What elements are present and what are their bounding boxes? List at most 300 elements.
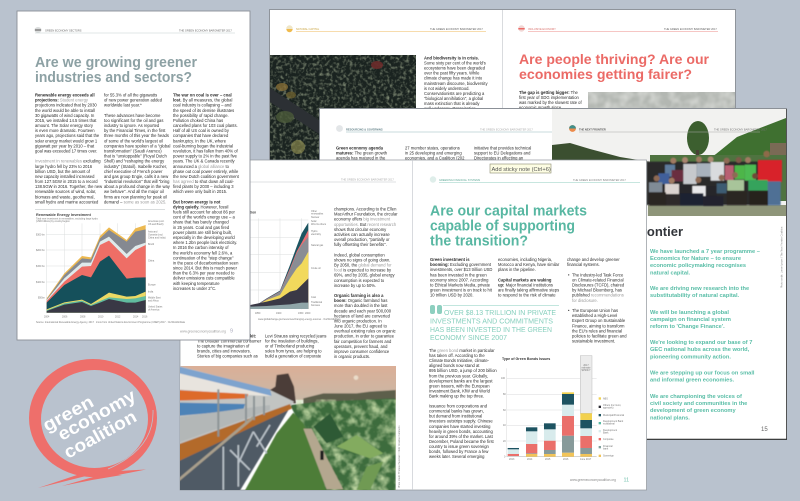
text: financial systems bullets: • xyxy=(568,308,570,313)
text: levi strauss: build a generation of corporate xyxy=(265,354,322,358)
chart y-axis labels: 0 xyxy=(504,456,506,458)
chart y-axis labels: 40 xyxy=(503,424,506,427)
text: war on coal and brown energy: power supply to 2% in the past five xyxy=(173,154,238,159)
text: war on coal and brown energy: The war on coal is over – coal xyxy=(173,92,232,98)
text: gigawatts and oil industry: of some of the world's largest oil xyxy=(104,138,163,143)
text: renewable energy exceeds projections: 138.5GW in 2016. Together, the new xyxy=(35,184,102,189)
text: gigawatts and oil industry: by the Financial Times, in the first xyxy=(104,128,166,133)
chart labels: Other xyxy=(311,210,317,213)
logo ring xyxy=(29,359,157,488)
chart labels: Solar xyxy=(311,220,317,223)
text: green bond market: weeks later. Several emerging xyxy=(429,454,485,459)
text: the gap is getting bigger: economic growth since xyxy=(519,105,562,110)
text: green bond market: Bank making up the top three. xyxy=(429,393,484,398)
text: broader commercial consumer: Stories of big companies such as xyxy=(197,354,258,358)
photo: group of people in front of trees xyxy=(552,109,786,216)
chart labels: renewables xyxy=(311,213,324,216)
text: green bond market: investors outstrips supply. Chinese xyxy=(429,419,493,424)
text: war on coal and brown energy: since 2014. But this is much power xyxy=(173,266,238,271)
text: circular economy and organic farming: hectares of land are converted xyxy=(334,313,391,318)
bar 2015 xyxy=(544,423,556,457)
text: green bond market: Issuance from corporations and xyxy=(429,404,488,409)
text: financial systems bullets: The European Union has xyxy=(572,308,618,313)
heading: capital markets: capable of supporting xyxy=(430,218,575,234)
text: renewable energy exceeds projections: projections: Student energy xyxy=(35,98,88,103)
text: war on coal and brown energy: cent of the world's energy use – a xyxy=(173,215,235,220)
chart region labels: Europe xyxy=(148,284,156,286)
page number 15: 15 xyxy=(761,427,768,433)
text: gigawatts and oil industry: industry" (Statoil). Isabelle Kocher, xyxy=(104,164,167,169)
item: national hubs: GEC national hubs across the world, xyxy=(650,347,750,353)
text: gigawatts and oil industry: that is "unstoppable" (Royal Dutch xyxy=(104,154,167,159)
text: war on coal and brown energy: with keeping temperature xyxy=(173,281,220,286)
text: circular economy and organic farming: By 2050, the global demand for xyxy=(334,262,392,267)
text: circular economy and organic farming: overhaul existing rules on organic xyxy=(334,329,396,334)
text: levi strauss: or of Timberland producing xyxy=(265,344,315,348)
text: levi strauss: Levi Strauss using recycled jeans xyxy=(265,334,326,338)
header: THE GREEN ECONOMY BAROMETER 2017 xyxy=(179,28,232,32)
text: circular economy and organic farming: shows no signs of going down. xyxy=(334,257,390,262)
chart axis labels: 2013 xyxy=(509,458,515,461)
text: broader commercial consumer: brands, cities and innovators. xyxy=(197,348,251,354)
text: member states: in 25 developing and emerging xyxy=(405,151,462,156)
text: renewable energy exceeds projections: goal was exceeded 17 times over. xyxy=(35,148,97,153)
photo credit: bridge: Photo credit: Thomas Pedersen / Flickr Creative Commons xyxy=(398,425,401,488)
text: renewable energy exceeds projections: 2015, we installed 14.5 times that xyxy=(35,118,97,123)
text: circular economy and organic farming: activities can actually increase xyxy=(334,232,390,237)
text: green bond market: heavily in green bonds, accounting xyxy=(429,429,493,434)
text: war on coal and brown energy: in 25 years. Coal and gas fired xyxy=(173,225,230,230)
chart region labels: United States xyxy=(148,306,163,308)
text: biodiversity in crisis: is not widely understood. xyxy=(424,86,470,91)
page spread: biodiversity and fairer economies: economies getting fairer? xyxy=(519,66,692,82)
chart legend labels: Bank xyxy=(603,432,609,434)
chart labels: Coal xyxy=(311,296,316,299)
item: small and informal economies: and informal green economies. xyxy=(650,378,734,384)
logo wordmark: coalition xyxy=(60,406,140,462)
text: renewable energy exceeds projections: from 127.5GW in 2015 to a record xyxy=(35,179,98,184)
text: green bond market: has taken off. According to the xyxy=(429,353,485,358)
text: circular economy and organic farming: more than doubled in the last xyxy=(334,303,388,308)
text: war on coal and brown energy: bankruptcy. In the UK, where xyxy=(173,138,227,143)
photo: concrete wall xyxy=(588,92,735,112)
bar June 2017 xyxy=(580,356,592,457)
text: green bond market: Investment Bank, KfW and World xyxy=(429,388,491,393)
bar 2013 xyxy=(508,448,519,456)
heading: greener industries: Are we growing greener xyxy=(35,55,197,71)
text: green bond market: but demand from institutional xyxy=(429,414,482,419)
text: war on coal and brown energy: companies that have declared xyxy=(173,133,229,138)
chart region labels: Americas (excl. xyxy=(148,220,165,223)
chart x-axis labels: 2012 xyxy=(115,316,121,318)
chart legend labels: agencies) xyxy=(603,406,614,410)
chart y-axis labels: 100 xyxy=(501,377,506,380)
text: financial systems bullets: the EU's rules and financial xyxy=(572,328,622,333)
text: circular economy and organic farming: in organic products. xyxy=(334,354,370,359)
item: economics for nature: We have launched a 7 year programme – xyxy=(650,249,760,255)
text: circular economy and organic farming: food is expected to increase by xyxy=(334,268,391,273)
text: gigawatts and oil industry: These advances have become xyxy=(104,113,161,118)
photo: railway bridge and banana plantation xyxy=(177,363,400,493)
header: biodiversity page: THE GREEN ECONOMY BAROMETER 2017 xyxy=(430,27,483,31)
text: war on coal and brown energy: continuation of the "step change" xyxy=(173,255,234,260)
text: green investment is booming: green investment is on track to hit xyxy=(430,288,493,293)
chart: type of green bond issuers xyxy=(501,356,625,461)
pull quote: HAS BEEN INVESTED IN THE GREEN xyxy=(430,325,552,334)
text: green bond market: commercial banks has grown, xyxy=(429,409,484,414)
text: circular economy and organic farming: production, in order to guarantee xyxy=(334,334,395,339)
text: gigawatts and oil industry: of new power generation added xyxy=(104,98,163,103)
chart legend labels: multilateral xyxy=(603,422,615,426)
chart region labels: of America xyxy=(148,308,160,312)
text: green bond market: aligned bonds now stand at xyxy=(429,363,480,368)
text: circular economy and organic farming: June 2017, the EU agreed to xyxy=(334,324,388,329)
text: circular economy and organic farming: into organic production. In xyxy=(334,318,382,323)
text: war on coal and brown energy: increases to under 2°C. xyxy=(173,286,216,291)
text: financial systems bullets: published recommendations xyxy=(572,293,624,298)
text: EU initiative: initiative that provides technical xyxy=(474,146,531,150)
text: member states: economies, and a Coalition (202 xyxy=(405,156,465,161)
header: fairer economies page xyxy=(518,25,718,32)
chart y-axis labels: $100 bn xyxy=(36,281,45,284)
text: gigawatts and oil industry: companies have spoken of a "global xyxy=(104,143,170,148)
text: circular economy and organic farming: decade and each year 500,000 xyxy=(334,308,392,313)
text: EU initiative: support to EU Delegations and xyxy=(474,151,531,156)
text: financial systems bullets: established a High-Level xyxy=(572,313,617,318)
text: green investment is booming: economy since 2007. According xyxy=(430,277,489,282)
heading: capital markets: the transition? xyxy=(430,234,528,250)
chart legend labels: Development Bank xyxy=(603,420,624,423)
chart y-axis labels: 20 xyxy=(503,440,506,443)
photo: aerial forest with road xyxy=(270,55,416,160)
page spread: the next frontier xyxy=(320,108,787,440)
text: war on coal and brown energy: announced a global alliance to xyxy=(173,164,229,169)
text: renewable energy exceeds projections: solar energy market would grow 1 xyxy=(35,138,98,143)
header: resourcing and governing: THE GREEN ECONOMY BAROMETER 2017 xyxy=(480,128,533,132)
chart labels: Wind & others xyxy=(311,223,327,226)
text: green investment is booming: booming: Excluding government xyxy=(430,262,491,267)
text: renewable energy exceeds projections: biomass and waste, geothermal, xyxy=(35,194,95,199)
heading: capital markets xyxy=(430,204,587,250)
chart: material consumption area xyxy=(250,210,341,321)
text: gigawatts and oil industry: we behave". And all the major oil xyxy=(104,189,164,194)
text: circular economy and organic farming: increase by up to 50%. xyxy=(334,283,376,288)
item: voices of civil society: national plans. xyxy=(650,415,690,421)
text: circular economy and organic farming: overall production, "partially or xyxy=(334,237,390,242)
text: war on coal and brown energy: coal-burning began the industrial xyxy=(173,143,233,148)
chart labels: Natural gas xyxy=(311,244,324,247)
running head: left page: THE GREEN ECONOMY BAROMETER 2017 xyxy=(341,178,394,182)
text: gigawatts and oil industry: three months of this year the heads xyxy=(104,133,169,138)
chart y-axis labels: $50bn xyxy=(38,296,45,300)
text: green bond market: The green bond market in particular xyxy=(429,348,495,353)
chart region labels: India xyxy=(148,290,154,294)
text: circular economy and organic farming: fully offsetting their benefits". xyxy=(334,242,387,247)
text: circular economy and organic farming: economy offers big investment xyxy=(334,217,390,222)
text: circular economy and organic farming: champions. According to the Ellen xyxy=(334,206,397,212)
text: war on coal and brown energy: But brown energy is not xyxy=(173,199,221,204)
page spread: capital markets xyxy=(177,160,646,493)
text: circular economy and organic farming: operators, prevent fraud, and xyxy=(334,344,388,349)
bar annotation: $150bn* xyxy=(582,369,591,372)
text: biodiversity in crisis: climate change has made it into xyxy=(424,76,483,81)
text: war on coal and brown energy: In 2016 the carbon intensity of xyxy=(173,245,229,250)
text: the gap is getting bigger: The xyxy=(571,90,578,95)
item: small and informal economies: We are stepping up our focus on small xyxy=(650,370,755,376)
text: war on coal and brown energy: than the 6.3% per year needed to xyxy=(173,271,235,276)
text: circular economy and organic farming: fair competition for farmers and xyxy=(334,339,392,344)
header: greening financial systems xyxy=(430,176,640,183)
chart x-axis labels: 2008 xyxy=(80,316,86,318)
text: the gap is getting bigger: first year of SDG implementation xyxy=(519,95,580,100)
chart labels: electricity xyxy=(311,233,322,236)
logo wordmark: economy xyxy=(54,385,139,444)
text: renewable energy exceeds projections: billion USD, but the amount of xyxy=(35,169,91,174)
website url: www.greeneconomycoalition.org xyxy=(570,478,616,482)
heading: greener industries: industries and sectors? xyxy=(35,70,192,86)
text: biodiversity in crisis: Conservationists are predicting a xyxy=(424,91,485,96)
header: GREEN ECONOMY SECTORS xyxy=(45,28,82,32)
text: war on coal and brown energy: revolution, it has fallen from 40% of xyxy=(173,148,239,153)
text: financial systems bullets: change and develop greener xyxy=(567,257,620,262)
text: financial systems bullets: The Industry-led Task Force xyxy=(572,272,624,277)
chart axis labels: June 2017 xyxy=(580,458,592,461)
text: war on coal and brown energy: where 1.2bn people lack electricity. xyxy=(173,240,237,245)
item: economics for nature: natural capital. xyxy=(650,270,691,276)
text: gigawatts and oil industry: demand – some as soon as 2025. xyxy=(104,199,166,204)
text: war on coal and brown energy: Half of all US coal is owned by xyxy=(173,128,230,133)
chart legend labels: Others (inc Govt, xyxy=(603,404,621,407)
text: green investment is booming: has been invested in the green xyxy=(430,272,487,277)
text: war on coal and brown energy: phase out coal power entirely, while xyxy=(173,169,239,174)
text: renewable energy exceeds projections: gigawatt per year by 2010 – that xyxy=(35,143,95,148)
text: gigawatts and oil industry: about a profound change in the way xyxy=(104,184,171,189)
text: circular economy and organic farming: Indeed, global consumption xyxy=(334,252,385,257)
text: financial systems bullets: on Climate-related Financial xyxy=(572,277,624,282)
chart axis labels: 2016 xyxy=(563,458,569,461)
chart source: Icons from United Nations Environment Programme (UNEP) 2017 · OurWorldinData xyxy=(96,321,186,324)
bar 2014 xyxy=(526,427,537,457)
text: green bond market: 895 billion USD, a jump of 200 billion xyxy=(429,368,497,373)
text: capital markets are waking up: economies, including Nigeria, xyxy=(498,257,552,262)
text: war on coal and brown energy: in the pace of decarbonisation seen xyxy=(173,260,239,265)
text: the gap is getting bigger: was marked by the slowest rate of xyxy=(519,100,582,105)
text: war on coal and brown energy: the new Dutch coalition government xyxy=(173,174,240,179)
text: green economy agenda: matures: The green growth xyxy=(336,151,387,156)
text: circular economy and organic farming: boom: Organic farmland has xyxy=(334,298,387,303)
header: the next frontier: THE NEXT FRONTIER xyxy=(579,128,606,132)
text: capital markets are waking up: to respond to the risk of climate xyxy=(498,293,556,298)
text: renewable energy exceeds projections: renewable sources of wind, solar, xyxy=(35,189,96,194)
item: economics for nature: Economics for Nature – to ensure xyxy=(650,256,741,262)
chart y-axis labels: $150 bn xyxy=(36,265,45,268)
chart region labels: China xyxy=(148,260,155,262)
text: biodiversity in crisis: mainstream discourse, biodiversity xyxy=(424,81,488,86)
text: renewable energy exceeds projections: large hydro fell by 23% to 2016 xyxy=(35,164,93,169)
chart title: Renewable Energy Investment xyxy=(36,213,92,217)
chart subtitle: (USD billions) by country/region xyxy=(36,220,70,223)
text: biodiversity in crisis: over the past fifty years. While xyxy=(424,71,480,76)
text: war on coal and brown energy: years. The UK & Canada recently xyxy=(173,159,236,164)
item: global campaign: campaign on financial system xyxy=(650,317,731,323)
chart legend labels: Municipal/Provincial xyxy=(603,414,625,417)
text: financial systems bullets: Finance, aiming to transform xyxy=(572,323,625,328)
text: green economy agenda: Green economy agenda xyxy=(336,146,384,150)
text: financial systems bullets: • xyxy=(568,272,570,277)
chart y-axis labels: 60 xyxy=(503,409,506,412)
text: green bond market: country to issue green sovereign xyxy=(429,444,490,449)
header: fairer economies page: THE GREEN ECONOMY BAROMETER 2017 xyxy=(664,27,717,31)
chart region labels: Asia and xyxy=(148,230,158,234)
pull quote: ECONOMY SINCE 2007 xyxy=(430,333,507,342)
text: gigawatts and oil industry: Shell) and "reshaping the energy xyxy=(104,159,165,164)
page number 11: 11 xyxy=(624,478,629,484)
header: fairer economies page: INCLUSIVE ECONOMY xyxy=(528,27,556,31)
text: war on coal and brown energy: Pollution choked China has xyxy=(173,118,223,123)
text: gigawatts and oil industry: transformation" (Saudi Aramco) xyxy=(104,148,162,153)
chart labels: Crude oil xyxy=(311,267,321,270)
text: green bond market: development banks are the largest xyxy=(429,378,493,383)
chart title fragment: tion xyxy=(250,210,256,214)
chart labels: Traditional xyxy=(311,301,323,304)
text: financial systems bullets: by Michael Bloomberg, has xyxy=(572,288,622,293)
text: green bond market: companies have started investing xyxy=(429,424,491,429)
chart source: www.globalchange.gov/resources/changing-energy-sources · OurWorldinData xyxy=(258,318,341,321)
chart region labels: China and India) xyxy=(148,236,166,240)
text: financial systems bullets: Disclosures (TCFD), chaired xyxy=(572,282,625,288)
text: green bond market: bonds, followed by France a few xyxy=(429,449,488,454)
text: financial systems bullets: policies to facilitate green and xyxy=(572,334,627,338)
text: green investment is booming: Green investment is xyxy=(430,257,470,262)
text: financial systems bullets: for disclosure. xyxy=(572,298,598,303)
pull quote: INVESTMENTS AND COMMITMENTS xyxy=(430,316,553,326)
chart region labels: Middle East xyxy=(148,296,161,300)
chart axis labels: 2014 xyxy=(527,458,533,461)
page spread: biodiversity and fairer economies xyxy=(270,10,736,170)
chart x-axis labels: 2010 xyxy=(98,316,104,318)
text: financial systems bullets: sustainable investment. xyxy=(572,339,615,344)
header: greening financial systems: THE GREEN ECONOMY BAROMETER 2017 xyxy=(573,178,626,182)
chart y-axis labels: $200 bn xyxy=(36,249,45,252)
item: new research: substitutability of natural capital. xyxy=(650,293,740,299)
text: broader commercial consumer: to capture the imagination of xyxy=(197,344,250,348)
text: war on coal and brown energy: the possibility of rapid change. xyxy=(173,113,229,118)
text: biodiversity in crisis: And biodiversity is in crisis. xyxy=(424,56,479,60)
text: biodiversity in crisis: Some sixty per cent of the world's xyxy=(424,61,486,66)
chart legend labels: Sovereign xyxy=(603,454,614,458)
chart: renewable energy investment xyxy=(35,210,186,324)
pull quote xyxy=(430,305,559,342)
item: national hubs: We're looking to expand our base of 7 xyxy=(650,340,752,346)
text: renewable energy exceeds projections: Investment in renewables excluding xyxy=(35,159,101,164)
text: war on coal and brown energy: dying quietly. However, fossil xyxy=(173,204,228,209)
item: national hubs: pioneering community action. xyxy=(650,354,731,360)
logo wordmark xyxy=(39,385,140,462)
header: greening financial systems: GREENING FINANCIAL SYSTEMS xyxy=(439,178,480,182)
text: broader commercial consumer: The broader commercial consumer xyxy=(197,338,262,344)
text: gigawatts and oil industry: industry to ignore. As reported xyxy=(104,123,160,128)
text: war on coal and brown energy: the world's economy fell 2.6%, a xyxy=(173,250,233,255)
text: war on coal and brown energy: lost. By all measures, the global xyxy=(173,98,232,103)
item: global campaign: reform to 'Change Finance'. xyxy=(650,324,725,330)
text: EU initiative: Directorates in effecting an xyxy=(474,156,524,161)
text: capital markets are waking up: Capital markets are waking xyxy=(498,277,552,282)
text: gigawatts and oil industry: and gas group Engie, calls it a new xyxy=(104,174,168,179)
header xyxy=(34,27,235,33)
text: capital markets are waking up: are finally taking affirmative steps xyxy=(498,288,559,293)
chart labels: Hydro xyxy=(311,230,318,233)
text: green bond market: for around 39% of the market. Last xyxy=(429,434,494,439)
text: gigawatts and oil industry: worldwide last year.* xyxy=(104,103,142,108)
text: renewable energy exceeds projections: new capacity installed increased xyxy=(35,174,95,179)
chart axis labels: 2015 xyxy=(545,458,551,461)
text: biodiversity in crisis: well underway. Organisation xyxy=(424,106,476,111)
chart subtitle: Total new investment in renewables, excluding large hydro xyxy=(36,217,98,220)
item: voices of civil society: civil society and communities in the xyxy=(650,401,747,407)
pull quote: OVER $8.13 TRILLION IN PRIVATE xyxy=(444,308,556,317)
chart axis years: 1950 xyxy=(298,312,304,315)
chart y-axis labels: 80 xyxy=(503,393,506,396)
chart axis years: 1850 xyxy=(255,312,261,315)
text: gigawatts and oil industry: firms are now planning for peak oil xyxy=(104,194,167,199)
logo wordmark: green xyxy=(39,391,97,435)
chart x-axis labels: 2006 xyxy=(62,316,68,318)
text: financial systems bullets: Expert Group on Sustainable xyxy=(572,318,626,323)
text: green economy agenda: agenda has matured in the xyxy=(336,156,386,161)
text: war on coal and brown energy: power plants are still being built, xyxy=(173,230,232,235)
heading: are people thriving: Are people thriving? Are our xyxy=(519,51,710,67)
header: the next frontier: THE GREEN ECONOMY BAROMETER 2017 xyxy=(714,128,767,132)
chart legend labels: ABS xyxy=(603,398,608,400)
chart labels: Nuclear xyxy=(311,216,319,219)
text: war on coal and brown energy: deliver emissions cuts compatible xyxy=(173,276,235,281)
chart legend labels: bank xyxy=(603,448,609,450)
text: gigawatts and oil industry: chief executive of French power xyxy=(104,169,163,174)
chart x-axis labels: 2016 xyxy=(142,316,148,318)
text: war on coal and brown energy: especially in the developing world xyxy=(173,235,235,240)
page: renewable energy xyxy=(17,11,250,340)
bar 2016 xyxy=(562,392,574,457)
text: war on coal and brown energy: cancelled plans for 103 coal plants. xyxy=(173,123,238,128)
chart region labels: and Africa xyxy=(148,300,159,302)
text: circular economy and organic farming: Organic farming is also a xyxy=(334,293,384,298)
text: war on coal and brown energy: the speed of its demise illustrates xyxy=(173,108,234,113)
text: war on coal and brown energy: has agreed to shut down all coal- xyxy=(173,179,234,184)
chart region labels: US and Brazil) xyxy=(148,223,164,226)
text: war on coal and brown energy: fuels still account for about 86 per xyxy=(173,210,236,215)
tooltip: add sticky note xyxy=(490,164,551,173)
chart region labels: Oceania (excl. xyxy=(148,233,164,236)
chart legend swatches xyxy=(599,397,601,457)
text: renewable energy exceeds projections: amount. The Solar energy story xyxy=(35,123,94,128)
text: capital markets are waking up: Morocco and Kenya, have similar xyxy=(498,262,560,267)
text: capital markets are waking up: up: Major financial institutions xyxy=(498,282,553,288)
chart axis years: 2000 xyxy=(305,312,311,315)
header: the next frontier xyxy=(569,125,767,132)
text: gigawatts and oil industry: "industrial revolution" that will "bring xyxy=(104,179,170,184)
logo ring highlight xyxy=(108,410,153,469)
heading: capital markets: Are our capital markets xyxy=(430,204,587,220)
chart y-axis labels: $300 bn xyxy=(36,234,45,236)
heading: the next frontier: The Next Frontier xyxy=(575,224,683,239)
text: renewable energy exceeds projections: projections indicated that by 2030 xyxy=(35,103,97,108)
text: green investment is booming: investments, over $13 trillion USD xyxy=(430,267,492,272)
text: renewable energy exceeds projections: years ago, projections said that the xyxy=(35,133,100,138)
quote mark xyxy=(430,305,442,314)
text: green bond market: from the previous year. Globally, xyxy=(429,373,488,378)
page number 9: 9 xyxy=(230,328,233,334)
chart legend labels: Development xyxy=(603,429,617,432)
